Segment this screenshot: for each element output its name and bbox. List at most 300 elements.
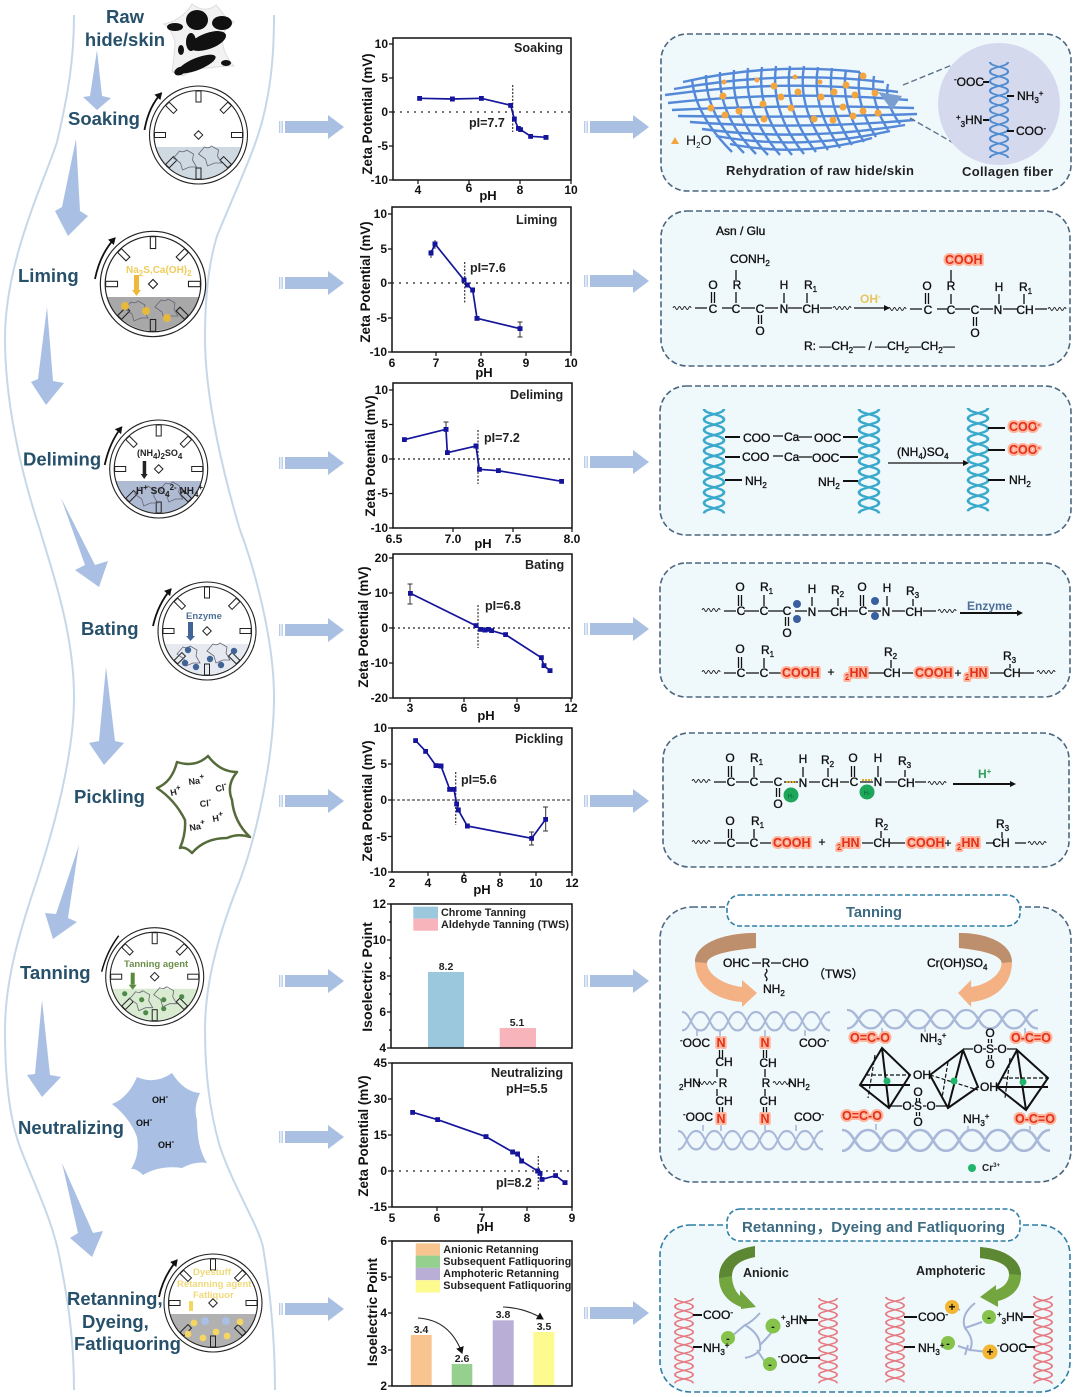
chart: retanning isoelectric point bars: 5 bbox=[380, 1270, 387, 1284]
chart: neutralizing zeta potential: 15 bbox=[374, 1128, 387, 1142]
panel: pickling reaction bbox=[663, 733, 1069, 867]
ion label: Na+ bbox=[188, 817, 207, 833]
hydrolysis products: CH bbox=[1003, 666, 1021, 680]
drum: retanning bbox=[159, 1254, 262, 1352]
hydrolysis products: O bbox=[735, 642, 745, 656]
aldehyde reagent formula: R bbox=[762, 956, 771, 970]
chart: tanning isoelectric point bars: 8 bbox=[379, 969, 386, 983]
anionic groups: -OOC bbox=[778, 1352, 808, 1366]
chart: retanning isoelectric point bars: 2 bbox=[380, 1379, 387, 1393]
chart: soaking zeta potential: 4 bbox=[415, 183, 422, 197]
chart: retanning isoelectric point bars: Anionic Retanning bbox=[443, 1244, 539, 1256]
chart: neutralizing zeta potential: 5 bbox=[389, 1211, 396, 1225]
peptide formula: O bbox=[782, 626, 792, 640]
hydrolysis products: + bbox=[818, 835, 826, 849]
chart: deliming zeta potential: pH bbox=[474, 536, 492, 551]
ion label: H+ bbox=[211, 809, 225, 824]
caption: rehydration: Rehydration of raw hide/skin bbox=[726, 163, 914, 178]
product groups: COO- bbox=[1009, 443, 1040, 457]
anionic groups: + 3HN bbox=[781, 1313, 807, 1329]
zoom guide lines bbox=[903, 63, 957, 145]
peptide formula: O bbox=[725, 751, 735, 765]
amphoteric groups: NH3+ bbox=[918, 1341, 945, 1357]
chart: bating zeta potential: 12 bbox=[564, 701, 578, 715]
product formula: C bbox=[924, 303, 933, 317]
reagent: proton: H+ bbox=[978, 767, 992, 781]
label: anionic: Anionic bbox=[743, 1266, 789, 1280]
drum label: deliming ions: H+ SO42- NH4+ bbox=[136, 483, 203, 499]
stage label: liming: Liming bbox=[18, 265, 79, 286]
charge markers: - bbox=[771, 1321, 775, 1333]
drum label: deliming agent: (NH4)2SO4 bbox=[137, 448, 183, 461]
left chelate formula: NH2 bbox=[745, 474, 767, 490]
chromium complex groups: O bbox=[913, 1115, 923, 1129]
stage label: deliming: Deliming bbox=[23, 448, 101, 470]
chart: liming zeta potential: 7 bbox=[433, 356, 440, 370]
hydrolysis products: R2 bbox=[875, 816, 889, 832]
chart: tanning isoelectric point bars: Isoelectric Point bbox=[360, 922, 376, 1032]
chart: neutralizing zeta potential: pH bbox=[476, 1219, 494, 1234]
chromium complex groups: O-C=O bbox=[1015, 1112, 1055, 1126]
product groups: COO- bbox=[1009, 420, 1040, 434]
collagen fiber close-up: -OOC bbox=[954, 75, 984, 89]
hydrolysis products: + bbox=[827, 665, 835, 679]
aldehyde crosslink: N bbox=[716, 1112, 726, 1126]
reagent: enzyme: Enzyme bbox=[967, 599, 1013, 613]
chart: neutralizing zeta potential: 8 bbox=[524, 1211, 531, 1225]
chart: soaking zeta potential: Soaking bbox=[514, 41, 563, 55]
chart: retanning isoelectric point bars: Isoelectric Point bbox=[364, 1258, 380, 1366]
chart: deliming zeta potential: Deliming bbox=[510, 388, 563, 402]
reactant formula: H bbox=[780, 278, 788, 292]
aldehyde crosslink: N bbox=[760, 1112, 770, 1126]
stage label: pickling: Pickling bbox=[74, 786, 145, 807]
chromium complex groups: NH3+ bbox=[920, 1031, 947, 1047]
bonds bbox=[724, 595, 1034, 673]
peptide formula: H bbox=[874, 751, 882, 765]
aldehyde reagent formula: （TWS） bbox=[813, 967, 864, 981]
charge markers bbox=[721, 1300, 998, 1371]
chart: bating zeta potential: 20 bbox=[375, 551, 388, 565]
legend: water: H2O bbox=[686, 132, 712, 150]
chromium complex groups: O bbox=[902, 1099, 912, 1113]
hydrolysis products bbox=[725, 814, 1010, 852]
legend: chromium bbox=[968, 1163, 1000, 1174]
chromium octahedra bbox=[860, 1048, 1048, 1110]
reagent: ammonium sulfate: (NH4)SO4 bbox=[897, 445, 949, 461]
reactant formula: C bbox=[756, 302, 765, 316]
aldehyde crosslink: CH bbox=[759, 1056, 777, 1070]
bonds bbox=[695, 270, 1047, 326]
chart: retanning isoelectric point bars: 3 bbox=[380, 1343, 387, 1357]
chart: bating zeta potential: pI=6.8 bbox=[485, 599, 521, 613]
chromium complex groups: O bbox=[973, 1042, 983, 1056]
chart: tanning isoelectric point bars: 6 bbox=[379, 1005, 386, 1019]
peptide formula: H bbox=[799, 752, 807, 766]
chart: deliming zeta potential: 7.0 bbox=[445, 532, 462, 546]
chromium complex groups: O bbox=[997, 1042, 1007, 1056]
aldehyde reagent formula bbox=[723, 956, 864, 998]
chart: neutralizing zeta potential: pI=8.2 bbox=[496, 1176, 532, 1190]
chart: tanning isoelectric point bars bbox=[360, 897, 572, 1055]
reactant formula: CH bbox=[802, 302, 820, 316]
chromium complex groups: O bbox=[913, 1085, 923, 1099]
aldehyde crosslink: N bbox=[760, 1036, 770, 1050]
ion label: Cl- bbox=[214, 779, 228, 794]
chart: retanning isoelectric point bars: Amphoteric Retanning bbox=[443, 1268, 559, 1280]
aldehyde crosslink: N bbox=[716, 1036, 726, 1050]
heading: hide/skin: hide/skin bbox=[85, 29, 165, 50]
chart: pickling zeta potential: 10 bbox=[374, 721, 387, 735]
left chelate formula: OOC bbox=[814, 431, 842, 445]
anionic groups bbox=[703, 1308, 808, 1366]
bonds bbox=[725, 428, 1005, 481]
aldehyde crosslink: -OOC bbox=[680, 1036, 710, 1050]
hydrolysis products bbox=[735, 642, 1021, 682]
aldehyde crosslink: COO- bbox=[799, 1036, 829, 1050]
hydrolysis products: R1 bbox=[751, 814, 765, 830]
chromium complex groups: S bbox=[986, 1042, 994, 1056]
label: amphoteric: Amphoteric bbox=[916, 1264, 986, 1278]
left chelate formula: COO bbox=[743, 431, 770, 445]
aldehyde crosslink: COO- bbox=[794, 1110, 824, 1124]
chromium ions bbox=[884, 1078, 1026, 1086]
panel: bating reaction bbox=[660, 563, 1070, 697]
chart: pickling zeta potential: Zeta Potential (mV) bbox=[360, 740, 375, 862]
chart: neutralizing zeta potential: Neutralizing bbox=[491, 1066, 563, 1080]
curved arrow: chromium bbox=[958, 933, 1012, 1007]
chart: neutralizing zeta potential: 30 bbox=[374, 1092, 387, 1106]
chart: bating zeta potential: 0 bbox=[381, 621, 388, 635]
bonds bbox=[693, 1315, 1035, 1358]
stage label: dyeing: Dyeing, bbox=[82, 1311, 149, 1332]
chart: soaking zeta potential: pH bbox=[479, 188, 497, 203]
proton markers: H+ bbox=[788, 794, 795, 800]
peptide formula: O bbox=[857, 580, 867, 594]
peptide formula bbox=[725, 751, 915, 811]
chart: soaking zeta potential: 10 bbox=[564, 183, 578, 197]
chart: tanning isoelectric point bars: 5.1 bbox=[510, 1017, 524, 1029]
product formula: C bbox=[947, 303, 956, 317]
peptide formula: R3 bbox=[898, 754, 912, 770]
curved arrow: amphoteric bbox=[980, 1247, 1021, 1307]
panel: deliming reaction bbox=[660, 386, 1071, 535]
proton markers bbox=[784, 780, 874, 802]
chart: bating zeta potential: 3 bbox=[407, 701, 414, 715]
charge markers: - bbox=[768, 1359, 772, 1371]
chart: soaking zeta potential bbox=[360, 37, 578, 203]
chart: neutralizing zeta potential: Zeta Potential (mV) bbox=[356, 1075, 371, 1197]
peptide formula: H bbox=[883, 581, 891, 595]
chart: bating zeta potential: -10 bbox=[371, 656, 388, 670]
aldehyde reagent formula: NH2 bbox=[763, 982, 785, 998]
peptide formula: CH bbox=[821, 776, 839, 790]
aldehyde crosslink: 2HN bbox=[679, 1076, 701, 1092]
chart: soaking zeta potential: 5 bbox=[381, 71, 388, 85]
chart: soaking zeta potential: 10 bbox=[375, 37, 388, 51]
drum label: tanning agent: Tanning agent bbox=[124, 959, 189, 970]
peptide formula: C bbox=[760, 604, 769, 618]
panel: tanning mechanism bbox=[660, 895, 1071, 1182]
chart: liming zeta potential: Liming bbox=[516, 213, 557, 227]
chromium complex groups bbox=[842, 1026, 1055, 1129]
chart: liming zeta potential: pH bbox=[475, 365, 493, 380]
curved arrow: aldehyde bbox=[695, 933, 757, 1007]
title pill: Retanning，Dyeing and Fatliquoring bbox=[742, 1219, 1005, 1236]
product formula bbox=[922, 253, 1034, 340]
drum label: liming agent: Na2S,Ca(OH)2 bbox=[126, 265, 192, 278]
chart: deliming zeta potential: -5 bbox=[377, 486, 388, 500]
ion label: OH- bbox=[158, 1137, 174, 1150]
product formula: O bbox=[970, 326, 980, 340]
product formula: H bbox=[995, 280, 1003, 294]
hydrolysis products: R2 bbox=[884, 645, 898, 661]
hydrolysis products: + bbox=[954, 666, 962, 680]
chart: pickling zeta potential: 4 bbox=[425, 876, 432, 890]
chart: liming zeta potential: pI=7.6 bbox=[470, 261, 506, 275]
R group definition: R: —CH2— / —CH2—CH2— bbox=[804, 339, 955, 355]
peptide formula: N bbox=[874, 775, 882, 789]
chart: soaking zeta potential: pI=7.7 bbox=[469, 116, 505, 130]
peptide formula: R1 bbox=[760, 580, 774, 596]
title pill bbox=[727, 895, 1020, 926]
legend: chromium: Cr3+ bbox=[982, 1163, 1000, 1174]
hydrolysis products: 2HN bbox=[845, 666, 868, 682]
peptide formula: C bbox=[783, 604, 792, 618]
hydrolysis products: C bbox=[750, 836, 759, 850]
sulfate bridges bbox=[889, 1039, 1017, 1116]
chart: pickling zeta potential: pI=5.6 bbox=[461, 773, 497, 787]
hydrolysis products: C bbox=[737, 666, 746, 680]
chart: tanning isoelectric point bars: 8.2 bbox=[439, 961, 453, 973]
product groups bbox=[1009, 420, 1040, 489]
chromium complex groups: O=C-O bbox=[842, 1109, 882, 1123]
chart: pickling zeta potential bbox=[360, 721, 579, 897]
aldehyde crosslink: R bbox=[719, 1076, 728, 1090]
aldehyde reagent formula: CHO bbox=[782, 956, 809, 970]
peptide formula: R2 bbox=[821, 753, 835, 769]
reactant formula: R bbox=[733, 278, 742, 292]
chart: liming zeta potential: 0 bbox=[380, 276, 387, 290]
chart: deliming zeta potential: pI=7.2 bbox=[484, 431, 520, 445]
chart: neutralizing zeta potential: 9 bbox=[569, 1211, 576, 1225]
chart: deliming zeta potential: 7.5 bbox=[505, 532, 522, 546]
chart: liming zeta potential: 10 bbox=[374, 207, 387, 221]
chart: bating zeta potential: Bating bbox=[525, 558, 564, 572]
title pill: Tanning bbox=[846, 905, 902, 921]
peptide formula: CH bbox=[830, 605, 848, 619]
peptide formula: CH bbox=[897, 776, 915, 790]
aldehyde crosslink bbox=[679, 1036, 829, 1126]
peptide formula: CH bbox=[905, 605, 923, 619]
chart: pickling zeta potential: 8 bbox=[497, 876, 504, 890]
chart: deliming zeta potential: 6.5 bbox=[386, 532, 403, 546]
stage label: bating: Bating bbox=[81, 618, 139, 639]
hydrolysis products: O bbox=[725, 814, 735, 828]
anionic groups: NH3+ bbox=[703, 1341, 730, 1357]
chart: soaking zeta potential: -10 bbox=[371, 173, 388, 187]
hydrolysis products: R1 bbox=[761, 643, 775, 659]
peptide formula: R3 bbox=[906, 584, 920, 600]
left chelate formula: Ca bbox=[784, 450, 800, 464]
ion label: Na+ bbox=[187, 772, 206, 787]
left chelate formula: Ca bbox=[784, 430, 800, 444]
product formula: C bbox=[971, 303, 980, 317]
chart: liming zeta potential: 6 bbox=[389, 356, 396, 370]
left chelate formula: OOC bbox=[812, 451, 840, 465]
peptide formula bbox=[735, 580, 923, 640]
retanning agent chains bbox=[732, 1303, 988, 1362]
collagen fiber close-up: + 3HN bbox=[956, 113, 982, 129]
chart: bating zeta potential: 10 bbox=[375, 586, 388, 600]
reactant formula: C bbox=[709, 302, 718, 316]
charge markers: - bbox=[987, 1312, 991, 1324]
reagent: hydroxide: OH- bbox=[860, 292, 881, 306]
legend: water bbox=[671, 132, 712, 150]
peptide formula: C bbox=[774, 775, 783, 789]
product formula: N bbox=[994, 303, 1002, 317]
hydrolysis products: CH bbox=[883, 666, 901, 680]
left chelate formula bbox=[742, 430, 842, 491]
product formula: R1 bbox=[1019, 280, 1033, 296]
peptide formula: C bbox=[750, 775, 759, 789]
collagen helices bbox=[704, 408, 988, 513]
chart: pickling zeta potential: 0 bbox=[380, 793, 387, 807]
hydrolysis products: R3 bbox=[996, 817, 1010, 833]
peptide formula: N bbox=[882, 605, 890, 619]
peptide formula: C bbox=[737, 604, 746, 618]
chart: neutralizing zeta potential: -15 bbox=[370, 1200, 387, 1214]
chart: liming zeta potential: -5 bbox=[376, 311, 387, 325]
charge markers: + bbox=[948, 1300, 956, 1314]
curved arrow: anionic bbox=[719, 1246, 756, 1309]
chart: deliming zeta potential: -10 bbox=[371, 521, 388, 535]
charge markers: - bbox=[726, 1333, 730, 1345]
left chelate formula: NH2 bbox=[818, 475, 840, 491]
amphoteric groups: + 3HN bbox=[997, 1310, 1023, 1326]
hydrolysis products: R3 bbox=[1003, 649, 1017, 665]
chart: soaking zeta potential: -5 bbox=[377, 139, 388, 153]
aldehyde reagent formula: OHC bbox=[723, 956, 750, 970]
aldehyde crosslink: R bbox=[762, 1076, 771, 1090]
chromium complex groups: OH bbox=[913, 1068, 931, 1082]
chromium reagent formula: Cr(OH)SO4 bbox=[927, 956, 988, 972]
peptide formula: C bbox=[850, 775, 859, 789]
icon: cow hide bbox=[164, 4, 234, 77]
chart: pickling zeta potential: 5 bbox=[380, 757, 387, 771]
drum: tanning bbox=[102, 928, 204, 1026]
chart: liming zeta potential bbox=[358, 207, 578, 380]
drum: liming bbox=[95, 231, 206, 337]
chromium complex groups: O bbox=[985, 1057, 995, 1071]
bonds bbox=[714, 766, 1026, 843]
enzyme cleavage dots bbox=[793, 597, 879, 623]
ion label: Cl- bbox=[199, 795, 212, 809]
chart: bating zeta potential: -20 bbox=[371, 691, 388, 705]
peptide formula: N bbox=[799, 776, 807, 790]
chart: soaking zeta potential: Zeta Potential (mV) bbox=[360, 53, 375, 175]
illustration: collagen mesh bbox=[665, 66, 917, 155]
left chelate formula: COO bbox=[742, 450, 769, 464]
chart: deliming zeta potential: 8.0 bbox=[564, 532, 581, 546]
chart: retanning isoelectric point bars: 6 bbox=[380, 1234, 387, 1248]
hydrolysis products: 2HN bbox=[837, 836, 860, 852]
collagen fiber close-up bbox=[938, 43, 1060, 165]
chart: bating zeta potential: 6 bbox=[461, 701, 468, 715]
chart: retanning isoelectric point bars: Subsequent Fatliquoring bbox=[443, 1280, 571, 1292]
reactant formula: R1 bbox=[804, 278, 818, 294]
amphoteric groups bbox=[918, 1310, 1027, 1357]
icon: neutralized hide bbox=[112, 1073, 207, 1175]
chart: liming zeta potential: 8 bbox=[478, 356, 485, 370]
collagen fiber close-up: COO- bbox=[1016, 124, 1046, 138]
aldehyde crosslink: -OOC bbox=[683, 1110, 713, 1124]
chart: retanning isoelectric point bars: 4 bbox=[380, 1306, 387, 1320]
chart: neutralizing zeta potential: 6 bbox=[434, 1211, 441, 1225]
chart: bating zeta potential bbox=[356, 551, 578, 723]
chart: deliming zeta potential bbox=[363, 383, 581, 551]
chart: bating zeta potential: Zeta Potential (mV) bbox=[356, 566, 371, 688]
charge markers: - bbox=[946, 1338, 950, 1350]
chart: deliming zeta potential: 0 bbox=[381, 452, 388, 466]
chromium complex groups: OH bbox=[980, 1080, 998, 1094]
chart: pickling zeta potential: pH bbox=[473, 882, 491, 897]
chart: neutralizing zeta potential: pH=5.5 bbox=[506, 1082, 548, 1096]
product groups: NH2 bbox=[1009, 473, 1031, 489]
title pill bbox=[727, 1209, 1020, 1241]
peptide formula: O bbox=[735, 580, 745, 594]
chart: soaking zeta potential: 8 bbox=[517, 183, 524, 197]
peptide formula: R2 bbox=[831, 583, 845, 599]
hydrolysis products: COOH bbox=[907, 836, 944, 850]
chromium complex groups: O=C-O bbox=[850, 1031, 890, 1045]
pink collagen helices bbox=[675, 1296, 1052, 1384]
stage label: retanning: Retanning, bbox=[67, 1288, 163, 1309]
hydrolysis products: COOH bbox=[773, 836, 810, 850]
arrows to charts bbox=[279, 115, 344, 1321]
heading: raw hide/skin: Raw bbox=[106, 6, 145, 27]
drum label: enzyme: Enzyme bbox=[186, 611, 222, 622]
chart: pickling zeta potential: 12 bbox=[565, 876, 579, 890]
icon: pickled hide bbox=[157, 756, 250, 853]
chart: retanning isoelectric point bars: Subsequent Fatliquoring bbox=[443, 1256, 571, 1268]
chart: liming zeta potential: -10 bbox=[370, 345, 387, 359]
chart: retanning isoelectric point bars: 3.4 bbox=[414, 1324, 428, 1336]
chart: tanning isoelectric point bars: 4 bbox=[379, 1041, 386, 1055]
hydrolysis products: 2HN bbox=[965, 666, 988, 682]
anionic groups: COO- bbox=[703, 1308, 733, 1322]
chart: retanning isoelectric point bars: 3.5 bbox=[537, 1321, 551, 1333]
product formula: CH bbox=[1016, 303, 1034, 317]
drum: deliming bbox=[105, 420, 208, 518]
peptide formula: N bbox=[808, 605, 816, 619]
reactant formula: CONH2 bbox=[730, 252, 770, 268]
hydrolysis products: C bbox=[727, 836, 736, 850]
chart: tanning isoelectric point bars: 10 bbox=[373, 933, 386, 947]
chart: neutralizing zeta potential: 45 bbox=[374, 1056, 387, 1070]
aldehyde crosslink: NH2 bbox=[788, 1076, 810, 1092]
caption: collagen fiber: Collagen fiber bbox=[962, 164, 1053, 179]
aldehyde crosslink: CH bbox=[759, 1094, 777, 1108]
aldehyde crosslink: CH bbox=[715, 1094, 733, 1108]
chromium complex groups: O bbox=[985, 1026, 995, 1040]
drum label: dyestuff: Dyestuff bbox=[193, 1267, 232, 1278]
drum: soaking bbox=[144, 86, 248, 184]
chromium complex groups: O-C=O bbox=[1011, 1031, 1051, 1045]
reactant formula: O bbox=[755, 324, 765, 338]
label: Asn / Glu: Asn / Glu bbox=[716, 224, 765, 238]
panel: rehydration of raw hide bbox=[661, 34, 1071, 191]
